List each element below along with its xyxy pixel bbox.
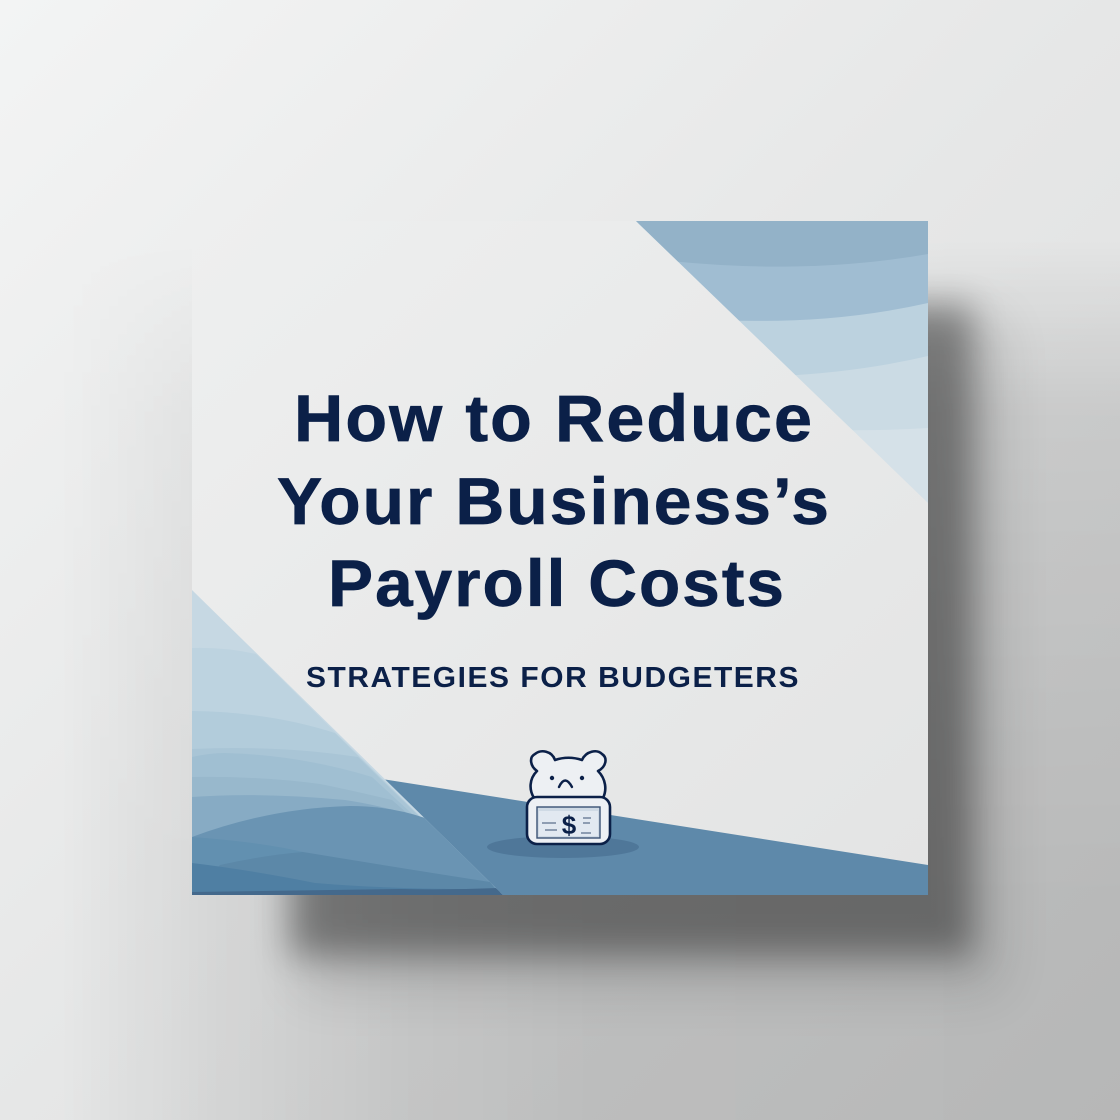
- icon shadow: [487, 836, 639, 858]
- ground band: [382, 779, 928, 895]
- bottom-left wave triangle: [192, 590, 512, 895]
- bear face: [550, 776, 584, 787]
- dollar bill: $: [562, 810, 577, 840]
- icon: bear piggy bank with dollar bill: [487, 751, 639, 858]
- bank body: [527, 797, 610, 844]
- title: Payroll Costs: [328, 546, 786, 620]
- panel: card: [192, 221, 928, 895]
- bear head: [531, 751, 605, 798]
- top-right wave triangle: [636, 221, 928, 503]
- title: How to Reduce: [294, 381, 814, 455]
- title: [277, 381, 831, 620]
- title: Your Business’s: [277, 464, 831, 538]
- dollar bill: [537, 807, 600, 840]
- subtitle: STRATEGIES FOR BUDGETERS: [306, 662, 800, 694]
- card shadow: [136, 274, 1120, 1120]
